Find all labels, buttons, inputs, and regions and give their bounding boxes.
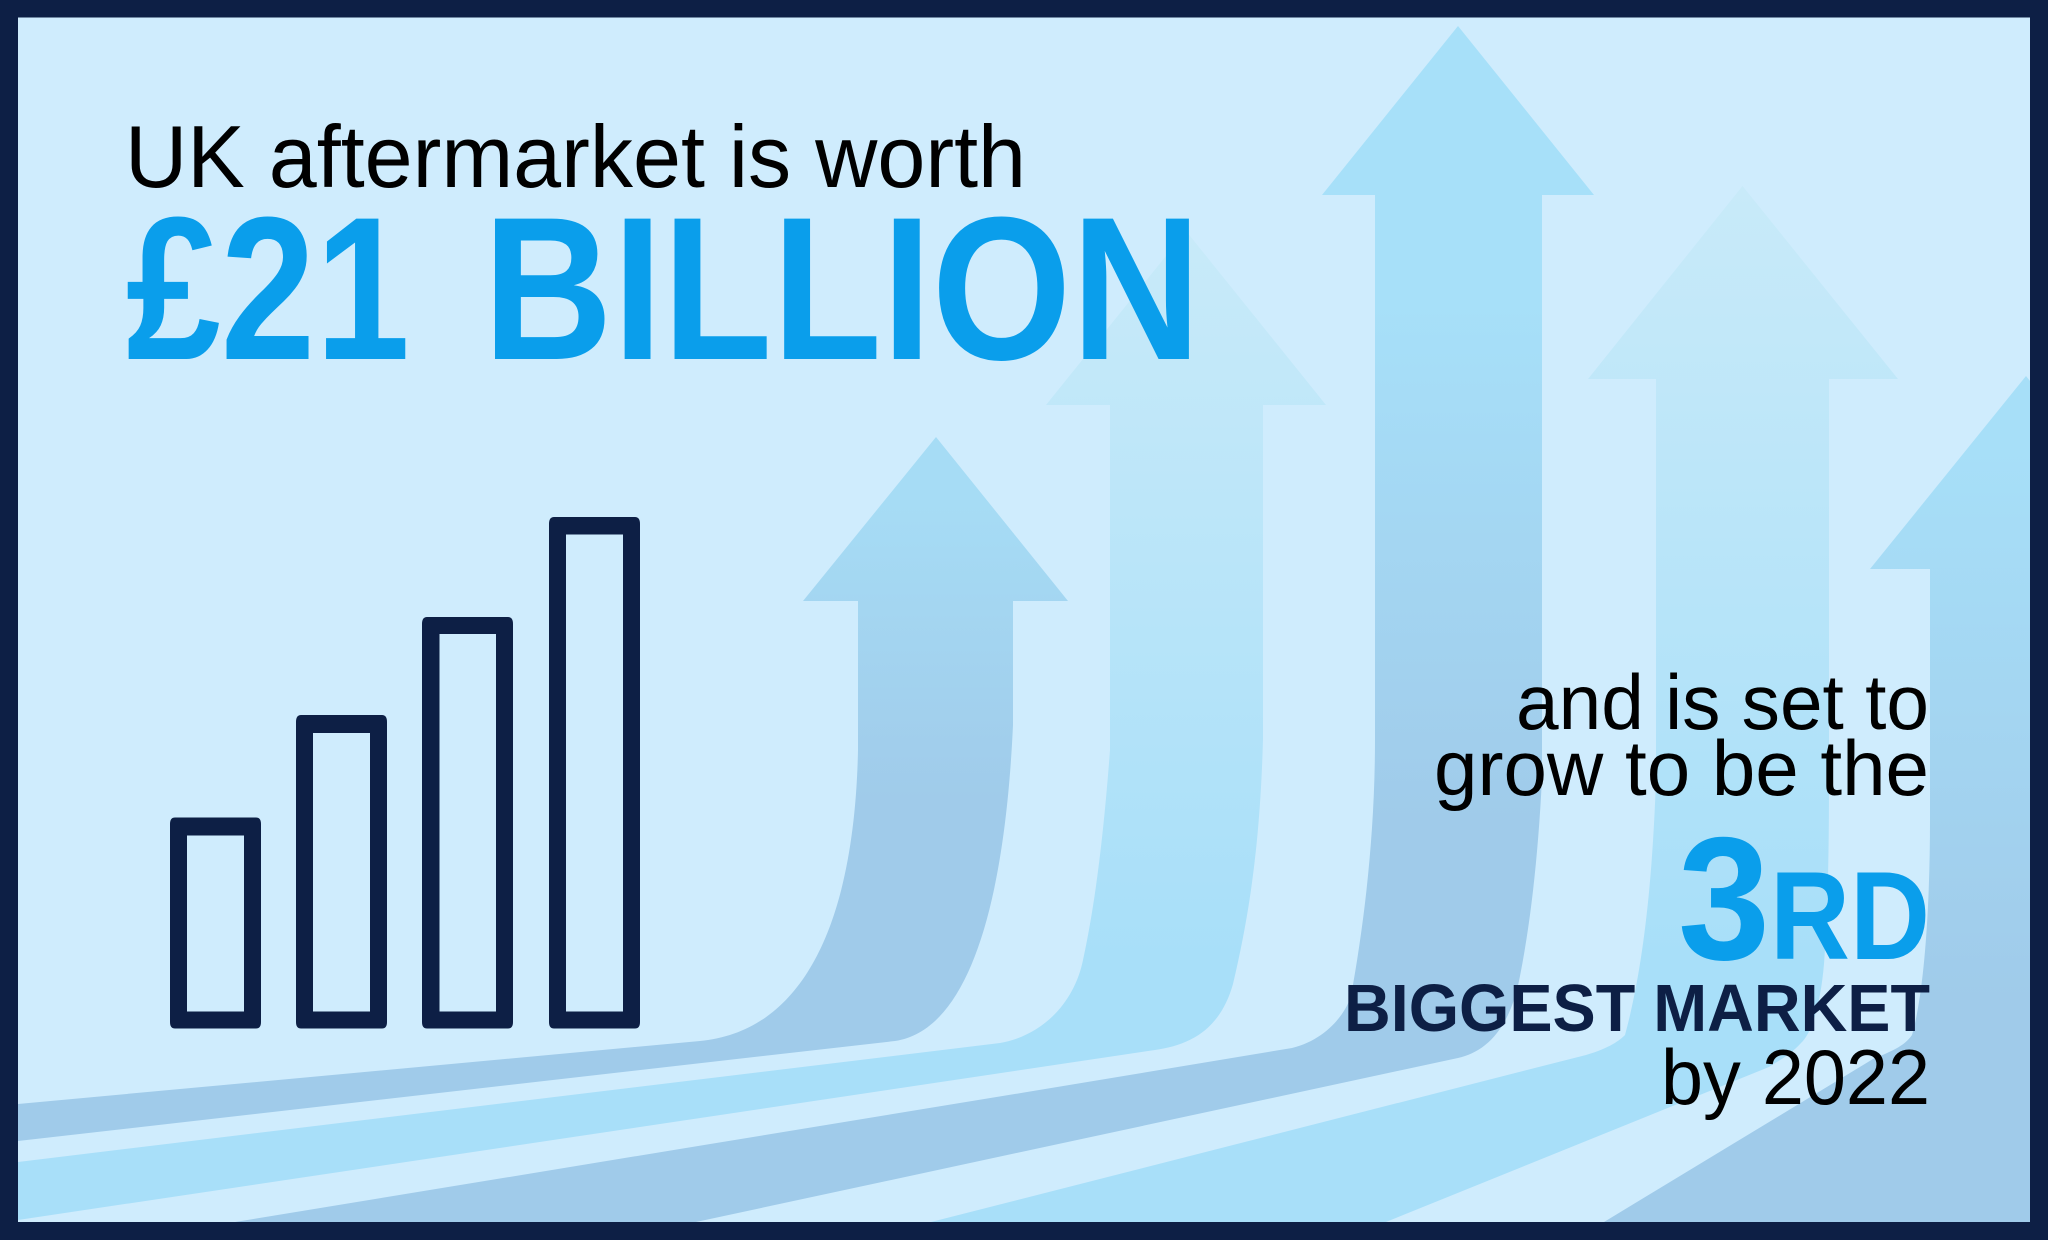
rank: 3: 3 <box>1678 802 1770 997</box>
headline figure: BILLION: BILLION <box>483 175 1201 403</box>
arrow 5 <box>1604 376 2030 1222</box>
arrow 2 <box>18 231 1326 1220</box>
line: BIGGEST MARKET: BIGGEST MARKET <box>1344 971 1930 1046</box>
icon: bar chart <box>170 517 640 1028</box>
rank suffix: RD: RD <box>1770 847 1930 986</box>
bar 2 <box>296 715 387 1028</box>
line: by 2022: by 2022 <box>1661 1033 1930 1121</box>
arrow 4 <box>931 186 1898 1222</box>
heading: UK aftermarket is worth: UK aftermarket is worth <box>125 107 1026 206</box>
arrow 1 <box>18 437 1068 1141</box>
headline figure: £21: £21 <box>126 175 410 403</box>
bar 1 <box>170 818 261 1028</box>
arrow 3 <box>235 26 1594 1222</box>
bar 3 <box>422 617 513 1028</box>
line: grow to be the: grow to be the <box>1434 724 1929 812</box>
text block: growth forecast <box>1344 658 1930 1121</box>
bar 4 <box>549 517 640 1028</box>
line: and is set to: and is set to <box>1516 658 1929 746</box>
